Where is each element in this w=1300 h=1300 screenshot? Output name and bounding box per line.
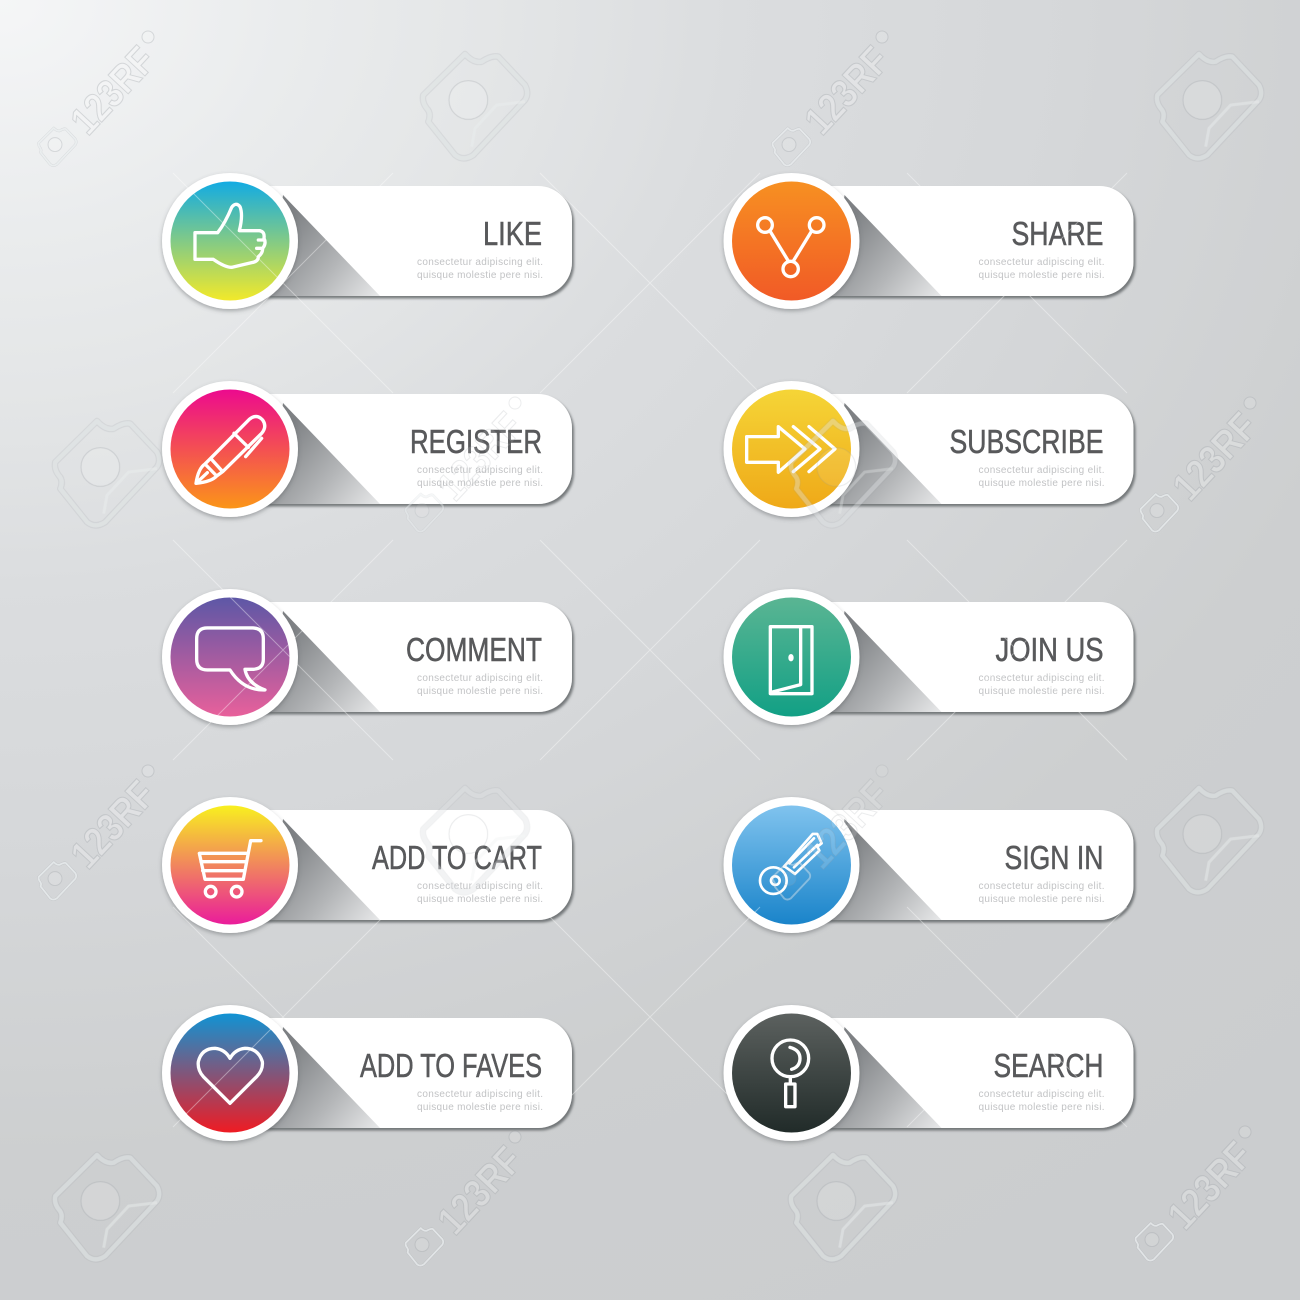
long shadow: register <box>270 403 380 504</box>
banner: register <box>230 394 572 504</box>
circle badge: search <box>724 1005 860 1141</box>
banner: share <box>792 186 1134 296</box>
body text: like: quisque molestie pere nisi. <box>417 270 543 281</box>
body text: like: consectetur adipiscing elit. <box>417 257 543 268</box>
gradient disc: register <box>170 390 290 508</box>
icon: thumbs up <box>195 204 265 267</box>
body text: comment: consectetur adipiscing elit. <box>417 673 543 684</box>
long shadow: share <box>832 195 942 296</box>
watermark egg <box>423 788 527 892</box>
watermark egg <box>1157 788 1261 892</box>
watermark logo: 123RF <box>429 1139 531 1243</box>
body text: sign in: consectetur adipiscing elit. <box>978 881 1104 892</box>
body text: join us: consectetur adipiscing elit. <box>978 673 1104 684</box>
icon: fountain pen <box>196 416 265 483</box>
watermark egg <box>791 421 895 525</box>
heading: sign in: SIGN IN <box>1004 839 1104 876</box>
watermark logo <box>1136 1126 1261 1261</box>
body text: add to faves <box>417 1089 543 1113</box>
banner: add to cart <box>230 810 572 920</box>
watermark logo <box>406 1131 531 1266</box>
long shadow: sign in <box>832 819 942 920</box>
button: add to faves <box>162 1005 572 1141</box>
body text: add to faves: quisque molestie pere nisi. <box>417 1102 543 1113</box>
watermark egg <box>423 54 527 158</box>
body text: register <box>417 465 543 489</box>
circle badge: comment <box>162 589 298 725</box>
heading: add to cart: ADD TO CART <box>372 839 542 876</box>
long shadow: add to faves <box>270 1027 380 1128</box>
long shadow: search <box>832 1027 942 1128</box>
banner: sign in <box>792 810 1134 920</box>
body text: like <box>417 257 543 281</box>
watermark logo <box>1141 397 1266 532</box>
icon: speech bubble <box>197 628 265 690</box>
button: comment <box>162 589 572 725</box>
icon: magnifying glass <box>772 1040 809 1107</box>
watermark egg <box>1157 54 1261 158</box>
body text: add to faves: consectetur adipiscing elit. <box>417 1089 543 1100</box>
heading: share: SHARE <box>1012 215 1104 252</box>
heading: add to faves: ADD TO FAVES <box>360 1047 542 1084</box>
body text: join us: quisque molestie pere nisi. <box>978 686 1104 697</box>
banner: add to faves <box>230 1018 572 1128</box>
heading: like: LIKE <box>483 215 542 252</box>
watermark logo: 123RF <box>1159 1134 1261 1238</box>
gradient disc: share <box>732 182 851 300</box>
body text: register: consectetur adipiscing elit. <box>417 465 543 476</box>
gradient disc: join us <box>732 598 851 716</box>
gradient disc: subscribe <box>732 390 851 508</box>
heading: subscribe: SUBSCRIBE <box>950 423 1104 460</box>
gradient disc: add to cart <box>170 806 290 924</box>
body text: subscribe <box>978 465 1104 489</box>
circle badge: like <box>162 173 298 309</box>
watermark egg <box>55 421 159 525</box>
icon: open door <box>770 627 812 694</box>
heading: register: REGISTER <box>410 423 542 460</box>
circle badge: register <box>162 381 298 517</box>
button: search <box>724 1005 1134 1141</box>
watermark logo: 123RF <box>62 773 164 877</box>
body text: search: consectetur adipiscing elit. <box>978 1089 1104 1100</box>
body text: add to cart <box>417 881 543 905</box>
watermark logo: 123RF <box>796 773 898 877</box>
body text: join us <box>978 673 1104 697</box>
circle badge: share <box>724 173 860 309</box>
banner: join us <box>792 602 1134 712</box>
icon: key <box>760 834 822 894</box>
icon: shopping cart <box>199 841 261 897</box>
gradient disc: sign in <box>732 806 851 924</box>
circle badge: add to faves <box>162 1005 298 1141</box>
watermark logo <box>773 31 898 166</box>
icon: heart <box>198 1048 262 1103</box>
button: sign in <box>724 797 1134 933</box>
banner: like <box>230 186 572 296</box>
heading: comment: COMMENT <box>406 631 542 668</box>
watermark logo: 123RF <box>62 39 164 143</box>
body text: subscribe: quisque molestie pere nisi. <box>978 478 1104 489</box>
body text: share <box>978 257 1104 281</box>
button: join us <box>724 589 1134 725</box>
banner: comment <box>230 602 572 712</box>
button: register <box>162 381 572 517</box>
circle badge: join us <box>724 589 860 725</box>
watermark logo <box>39 765 164 900</box>
icon: share nodes <box>758 218 824 277</box>
heading: join us: JOIN US <box>996 631 1104 668</box>
body text: share: consectetur adipiscing elit. <box>978 257 1104 268</box>
long shadow: comment <box>270 611 380 712</box>
body text: comment <box>417 673 543 697</box>
gradient disc: search <box>732 1014 851 1132</box>
long shadow: subscribe <box>832 403 942 504</box>
body text: share: quisque molestie pere nisi. <box>978 270 1104 281</box>
banner: search <box>792 1018 1134 1128</box>
gradient disc: add to faves <box>170 1014 290 1132</box>
gradient disc: like <box>170 182 290 300</box>
body text: add to cart: consectetur adipiscing elit. <box>417 881 543 892</box>
body text: sign in: quisque molestie pere nisi. <box>978 894 1104 905</box>
body text: search: quisque molestie pere nisi. <box>978 1102 1104 1113</box>
button: like <box>162 173 572 309</box>
button: add to cart <box>162 797 572 933</box>
body text: sign in <box>978 881 1104 905</box>
body text: search <box>978 1089 1104 1113</box>
circle badge: sign in <box>724 797 860 933</box>
long shadow: add to cart <box>270 819 380 920</box>
icon: arrow with chevrons <box>747 427 835 472</box>
watermark logo <box>406 397 531 532</box>
button: subscribe <box>724 381 1134 517</box>
watermark egg <box>791 1155 895 1259</box>
body text: comment: quisque molestie pere nisi. <box>417 686 543 697</box>
watermark logo <box>39 31 164 166</box>
body text: subscribe: consectetur adipiscing elit. <box>978 465 1104 476</box>
watermark logo: 123RF <box>429 405 531 509</box>
long shadow: like <box>270 195 380 296</box>
banner: subscribe <box>792 394 1134 504</box>
body text: register: quisque molestie pere nisi. <box>417 478 543 489</box>
body text: add to cart: quisque molestie pere nisi. <box>417 894 543 905</box>
watermark logo <box>773 765 898 900</box>
watermark egg <box>55 1155 159 1259</box>
circle badge: add to cart <box>162 797 298 933</box>
gradient disc: comment <box>170 598 290 716</box>
circle badge: subscribe <box>724 381 860 517</box>
watermark logo: 123RF <box>796 39 898 143</box>
watermark logo: 123RF <box>1164 405 1266 509</box>
button: share <box>724 173 1134 309</box>
heading: search: SEARCH <box>994 1047 1104 1084</box>
long shadow: join us <box>832 611 942 712</box>
